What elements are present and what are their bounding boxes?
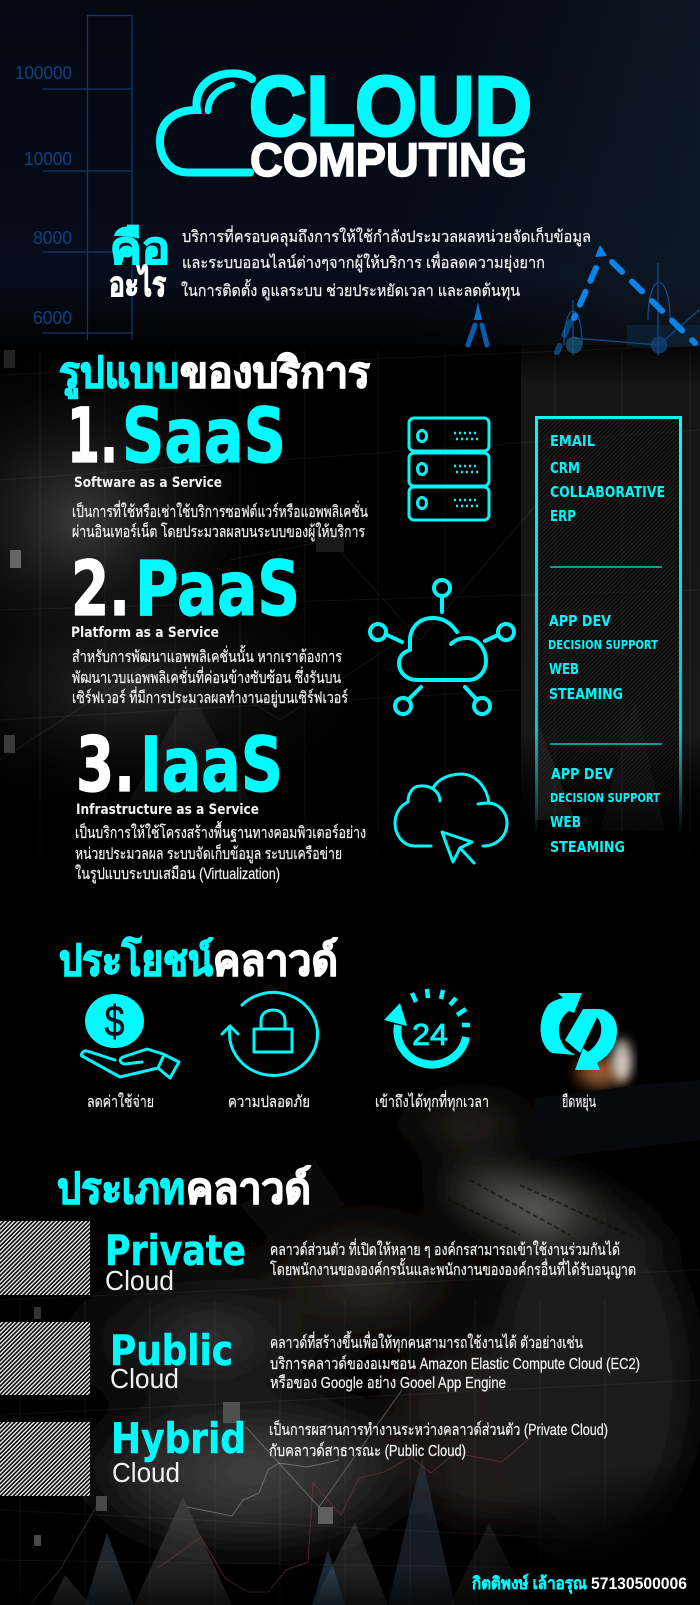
panel: private cloud: Cloud bbox=[105, 1265, 174, 1296]
footer credit: กิตติพงษ์ เล้าอรุณ bbox=[472, 1573, 587, 1594]
panel: public cloud bbox=[0, 1322, 640, 1395]
what-is text: ในการติดตั้ง ดูแลระบบ ช่วยประหยัดเวลา และลดต้นทุน bbox=[181, 279, 520, 301]
panel: IaaS: ในรูปแบบระบบเสมือน (Virtualization) bbox=[75, 864, 280, 884]
photo bbox=[0, 1085, 700, 1570]
panel: IaaS: เป็นบริการให้ใช้โครงสร้างพื้นฐานทางคอมพิวเตอร์อย่าง bbox=[75, 821, 366, 842]
panel: service examples: DECISION SUPPORT bbox=[548, 637, 658, 652]
title: COMPUTING bbox=[250, 133, 527, 186]
panel: IaaS: 3. bbox=[76, 720, 135, 809]
icon: 24 hours bbox=[384, 989, 470, 1065]
panel: service examples: APP DEV bbox=[549, 612, 611, 630]
chart axis with scale labels bbox=[15, 16, 132, 340]
panel: PaaS bbox=[71, 544, 348, 708]
panel: public cloud: Public bbox=[110, 1326, 233, 1375]
panel: service examples: CRM bbox=[550, 459, 580, 477]
icon: cloud with cursor bbox=[395, 774, 507, 863]
panel: SaaS: SaaS bbox=[122, 391, 286, 480]
panel: service examples: EMAIL bbox=[550, 432, 595, 450]
benefit labels: ความปลอดภัย bbox=[228, 1094, 310, 1111]
heading: service models: ของบริการ bbox=[180, 349, 370, 396]
panel: service examples: COLLABORATIVE bbox=[550, 483, 665, 501]
panel: SaaS: Software as a Service bbox=[74, 475, 222, 491]
panel: PaaS: พัฒนาเวบแอพพลิเคชั่นที่ค่อนข้างซับซ้อน ซึ่งรันบน bbox=[72, 666, 341, 687]
blue dashed network graphic bbox=[468, 245, 700, 355]
panel: service examples: DECISION SUPPORT bbox=[550, 790, 660, 805]
what-is heading bbox=[109, 224, 170, 304]
what-is heading: อะไร bbox=[109, 264, 167, 304]
panel: service examples: ERP bbox=[550, 507, 576, 525]
footer credit: 57130500006 bbox=[591, 1574, 687, 1593]
lower grid bbox=[0, 1270, 700, 1605]
panel: service examples: APP DEV bbox=[551, 765, 613, 783]
heading: benefits bbox=[59, 936, 338, 984]
panel: PaaS: 2. bbox=[71, 544, 130, 633]
logo: cloud outline bbox=[160, 73, 252, 172]
panel: PaaS: PaaS bbox=[135, 544, 300, 633]
panel: IaaS bbox=[75, 720, 366, 884]
title: CLOUD bbox=[249, 59, 532, 153]
panel: hybrid cloud bbox=[0, 1414, 608, 1496]
panel: SaaS bbox=[67, 391, 368, 542]
grid bbox=[0, 345, 700, 860]
panel: hybrid cloud: เป็นการผสานการทำงานระหว่างคลาวด์ส่วนตัว (Private Cloud) bbox=[269, 1419, 608, 1439]
panel: hybrid cloud: กับคลาวด์สาธารณะ (Public Cloud) bbox=[269, 1441, 466, 1460]
panel: SaaS: 1. bbox=[67, 391, 118, 480]
panel: PaaS: เซิร์ฟเวอร์ ที่มีการประมวลผลทำงานอยู่บนเซิร์ฟเวอร์ bbox=[72, 686, 348, 708]
what-is heading: คือ bbox=[110, 224, 170, 273]
chart axis with scale labels: 10000 bbox=[24, 149, 72, 169]
panel: service examples: WEB bbox=[550, 813, 581, 831]
heading: service models bbox=[59, 349, 370, 399]
heading: cloud types: คลาวด์ bbox=[186, 1165, 311, 1212]
panel: service examples bbox=[535, 416, 682, 856]
icon: padlock with arrow bbox=[222, 992, 318, 1075]
panel: public cloud: คลาวด์ที่สร้างขึ้นเพื่อให้ทุกคนสามารถใช้งานได้ ตัวอย่างเช่น bbox=[270, 1331, 583, 1353]
panel: public cloud: Cloud bbox=[110, 1363, 179, 1394]
panel: private cloud: Private bbox=[105, 1226, 246, 1275]
panel: service examples: STEAMING bbox=[549, 685, 623, 703]
icon: server rack bbox=[409, 418, 489, 520]
what-is text: และระบบออนไลน์ต่างๆจากผู้ให้บริการ เพื่อลดความยุ่งยาก bbox=[182, 251, 545, 273]
icon: money in hand: $ bbox=[104, 997, 124, 1046]
benefit labels: เข้าถึงได้ทุกที่ทุกเวลา bbox=[375, 1090, 489, 1112]
panel: PaaS: สำหรับการพัฒนาแอพพลิเคชั่นนั้น หากเราต้องการ bbox=[72, 645, 342, 666]
chart axis with scale labels: 100000 bbox=[15, 63, 72, 83]
icon: flexible arrows bbox=[541, 993, 617, 1070]
panel: private cloud bbox=[0, 1221, 636, 1296]
panel: PaaS: Platform as a Service bbox=[71, 625, 219, 641]
heading: service models: รูปแบบ bbox=[59, 349, 179, 399]
panel: public cloud: หรือของ Google อย่าง Gooel App Engine bbox=[270, 1374, 506, 1392]
panel: IaaS: Infrastructure as a Service bbox=[76, 802, 259, 818]
heading: cloud types bbox=[57, 1165, 311, 1212]
panel: SaaS: เป็นการที่ใช้หรือเช่าใช้บริการซอฟต์แวร์หรือแอพพลิเคชั่น bbox=[72, 500, 368, 521]
heading: benefits: ประโยชน์ bbox=[59, 936, 213, 984]
icon: money in hand bbox=[81, 994, 179, 1078]
panel: SaaS: ผ่านอินเทอร์เน็ต โดยประมวลผลบนระบบของผู้ให้บริการ bbox=[72, 521, 365, 542]
benefit labels: ลดค่าใช้จ่าย bbox=[87, 1092, 154, 1111]
icon: 24 hours: 24 bbox=[412, 1017, 448, 1052]
benefit labels bbox=[87, 1090, 596, 1112]
what-is text bbox=[181, 225, 591, 301]
panel: hybrid cloud: Hybrid bbox=[111, 1414, 246, 1463]
chart axis with scale labels: 6000 bbox=[33, 308, 72, 328]
what-is text: บริการที่ครอบคลุมถึงการให้ใช้กำลังประมวลผลหน่วยจัดเก็บข้อมูล bbox=[182, 225, 591, 247]
heading: cloud types: ประเภท bbox=[57, 1165, 185, 1212]
panel: service examples: WEB bbox=[549, 660, 579, 678]
panel: service examples: STEAMING bbox=[550, 838, 625, 856]
footer credit bbox=[472, 1573, 687, 1594]
panel: IaaS: หน่วยประมวลผล ระบบจัดเก็บข้อมูล ระบบเครือข่าย bbox=[75, 843, 342, 864]
benefit labels: ยืดหยุ่น bbox=[562, 1093, 596, 1112]
heading: benefits: คลาวด์ bbox=[213, 937, 338, 984]
icon: cloud network bbox=[370, 580, 514, 714]
chart axis with scale labels: 8000 bbox=[33, 228, 72, 248]
panel: hybrid cloud: Cloud bbox=[112, 1457, 180, 1488]
panel: IaaS: IaaS bbox=[140, 720, 283, 809]
